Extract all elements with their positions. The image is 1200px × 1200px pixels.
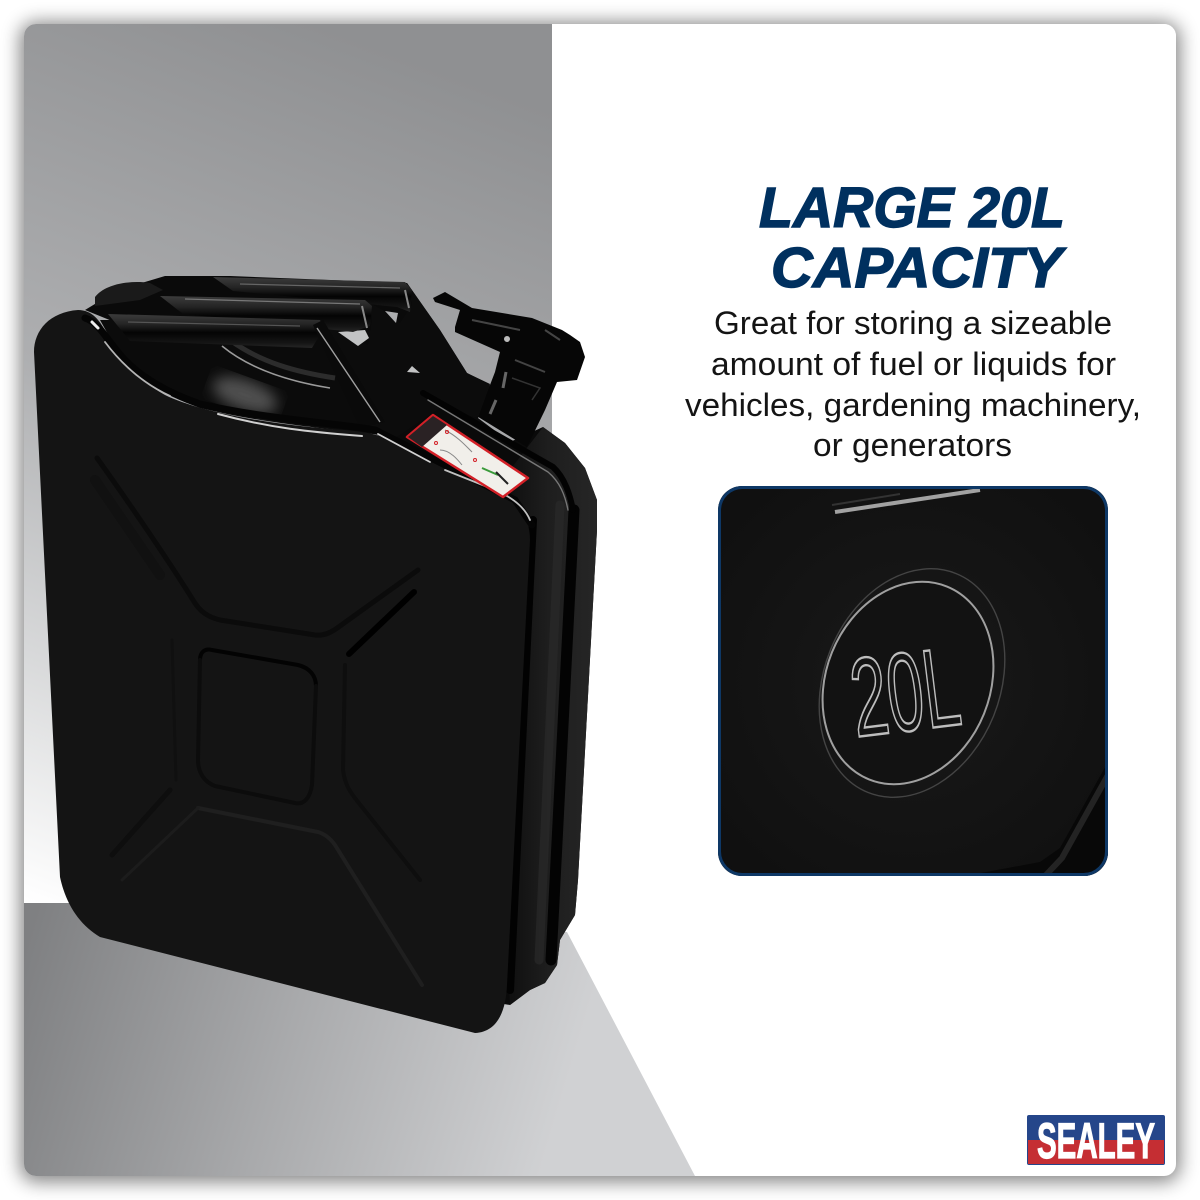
bracket plate xyxy=(322,283,490,440)
description text: Great for storing a sizeable xyxy=(714,305,1112,341)
description text: vehicles, gardening machinery, xyxy=(685,387,1141,423)
front face of can xyxy=(34,310,530,1033)
embossed cross pattern xyxy=(95,458,422,985)
spout and cap xyxy=(433,292,585,447)
heading xyxy=(759,176,1067,300)
diagonal handle bar xyxy=(313,320,385,428)
logo: SEALEY xyxy=(1027,1113,1165,1169)
filler cap rim xyxy=(222,346,330,388)
centre recess xyxy=(200,649,316,686)
description text: or generators xyxy=(813,427,1012,463)
front bar xyxy=(108,314,324,348)
middle bar xyxy=(160,296,372,332)
lower right dark corner xyxy=(983,768,1108,876)
bracket gaps xyxy=(338,311,420,373)
lower channel xyxy=(198,808,422,985)
outer ring xyxy=(818,568,1006,798)
warning label xyxy=(407,415,528,497)
upper channel xyxy=(97,458,418,635)
handle highlights xyxy=(128,284,409,328)
photo background xyxy=(718,486,1108,876)
logo blue band xyxy=(1027,1115,1165,1165)
can side panel xyxy=(500,427,597,1005)
label dark header xyxy=(408,416,447,447)
left knob xyxy=(95,282,163,306)
illustration: black jerry can xyxy=(34,276,597,1033)
inner ring xyxy=(822,580,994,786)
description text: amount of fuel or liquids for xyxy=(711,346,1116,382)
detail photo: 20L embossed badge xyxy=(718,486,1108,880)
rim highlights xyxy=(85,318,573,525)
spout highlights xyxy=(472,320,560,414)
left strip xyxy=(95,480,160,575)
label base xyxy=(407,415,528,497)
heading: CAPACITY xyxy=(771,236,1067,300)
right slit xyxy=(349,592,414,654)
description text xyxy=(685,305,1141,463)
heading: LARGE 20L xyxy=(759,176,1065,240)
diagonal bar highlight xyxy=(317,328,380,422)
white cut above floor right of wall xyxy=(552,24,1176,932)
can rear body xyxy=(85,276,597,1005)
photo border xyxy=(720,488,1106,874)
rear bar xyxy=(213,277,412,312)
side seams xyxy=(510,505,574,990)
reflection on top surface xyxy=(208,369,282,421)
label pictograms xyxy=(434,430,508,484)
embossed value: 20L xyxy=(844,624,967,761)
panel: grey wall background xyxy=(24,24,552,904)
streak highlight xyxy=(835,490,980,512)
panel: grey floor background xyxy=(24,903,695,1176)
logo red band xyxy=(1028,1140,1164,1164)
top surface with filler cap xyxy=(100,320,392,435)
